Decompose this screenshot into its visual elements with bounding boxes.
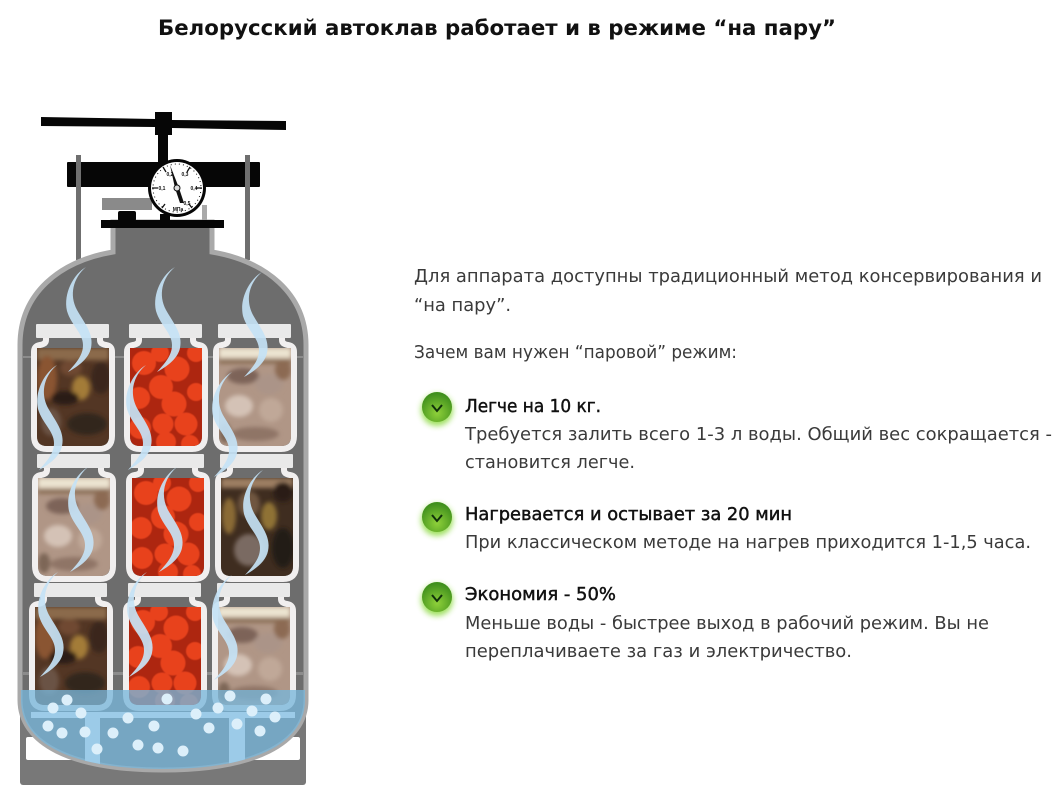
- benefit 1: [421, 392, 1052, 473]
- benefit heading: Экономия - 50%: [465, 585, 616, 605]
- benefit text: [464, 425, 1052, 473]
- benefit heading: Нагревается и остывает за 20 мин: [465, 505, 792, 525]
- intro text: Для аппарата доступны традиционный метод консервирования и: [414, 267, 1042, 287]
- benefit text: переплачиваете за газ и электричество.: [465, 642, 852, 662]
- pressure gauge: 0,5: [184, 201, 191, 207]
- benefit text: Требуется залить всего 1-3 л воды. Общий вес сокращается -: [464, 425, 1052, 445]
- jars with preserves: [32, 324, 296, 712]
- benefit heading: Легче на 10 кг.: [465, 397, 601, 417]
- steam wisps: [37, 267, 269, 680]
- valve plate: [101, 198, 224, 228]
- benefit 3: [421, 582, 989, 662]
- autoclave stand base: [20, 690, 306, 785]
- side rods: [76, 155, 250, 260]
- benefit text: [465, 614, 989, 662]
- intro text: “на пару”.: [414, 296, 511, 316]
- inner rack: [31, 712, 295, 764]
- row 1 jars: [34, 324, 294, 453]
- icon: green check: [421, 582, 453, 616]
- water bubbles: [42, 690, 280, 756]
- pressure gauge: 0,4: [191, 186, 198, 192]
- benefit 2: [421, 502, 1031, 553]
- benefit text: Меньше воды - быстрее выход в рабочий режим. Вы не: [465, 614, 989, 634]
- title: Белорусский автоклав работает и в режиме “на пару”: [158, 16, 836, 40]
- row 2 jars: [35, 454, 296, 583]
- benefit text: При классическом методе на нагрев приходится 1-1,5 часа.: [465, 533, 1031, 553]
- autoclave body: [20, 222, 306, 770]
- benefit text: становится легче.: [465, 453, 635, 473]
- icon: green check: [421, 502, 453, 536]
- pressure gauge: 0,1: [159, 186, 166, 192]
- pressure gauge: [148, 159, 206, 217]
- row 3 jars: [32, 583, 293, 712]
- faint jar shelf lines: [23, 356, 303, 675]
- water level: [21, 690, 305, 770]
- intro text: [414, 267, 1042, 363]
- icon: green check: [421, 392, 453, 426]
- pressure gauge: МПа: [173, 207, 183, 213]
- pressure gauge: 0,2: [167, 172, 174, 178]
- pressure gauge: 0,3: [182, 172, 189, 178]
- illustration: autoclave: [20, 112, 306, 785]
- clamp screw handle: [41, 112, 286, 165]
- intro text: Зачем вам нужен “паровой” режим:: [414, 343, 737, 363]
- clamp bar: [67, 162, 260, 187]
